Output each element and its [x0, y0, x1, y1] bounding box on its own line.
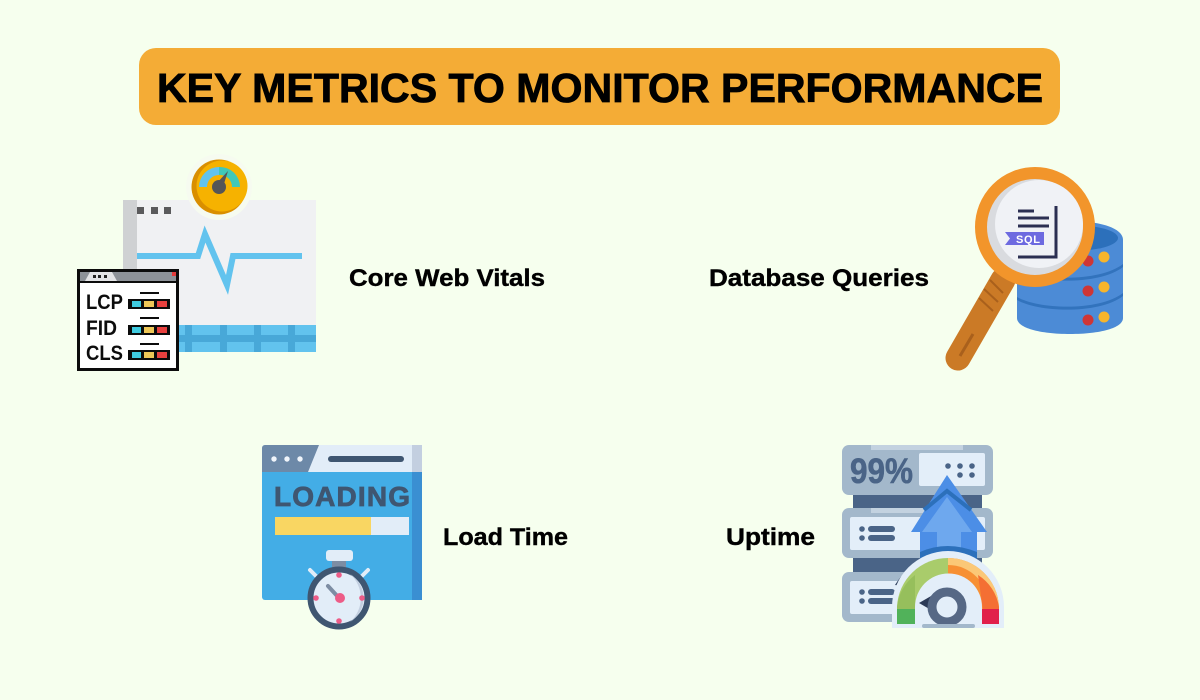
icon: server uptime with gauge: [842, 445, 1004, 628]
title: [139, 48, 1060, 125]
icon: performance gauge: [892, 551, 1004, 628]
icon: database with magnifier: SQL: [1016, 234, 1040, 246]
label: Database Queries: Database Queries: [709, 265, 929, 292]
icon: loading window with stopwatch: LOADING: [274, 481, 410, 512]
icon: stopwatch: [310, 550, 368, 626]
icon: up arrow: [911, 475, 987, 568]
label: Core Web Vitals: Core Web Vitals: [349, 265, 545, 292]
icon: database with magnifier: [958, 173, 1123, 358]
icon: core web vitals dashboard: [78, 154, 316, 370]
label: Load Time: Load Time: [443, 524, 568, 551]
icon: speed gauge: [186, 154, 252, 220]
panel: LCP FID CLS window: LCP: [86, 291, 123, 314]
panel: LCP FID CLS window: FID: [86, 317, 117, 340]
label: Uptime: Uptime: [726, 524, 815, 551]
title: KEY METRICS TO MONITOR PERFORMANCE: [157, 65, 1043, 111]
panel: LCP FID CLS window: [78, 270, 178, 370]
icon: loading window with stopwatch: [262, 445, 422, 626]
icon: server uptime with gauge: 99%: [850, 452, 913, 491]
panel: LCP FID CLS window: CLS: [86, 342, 123, 365]
